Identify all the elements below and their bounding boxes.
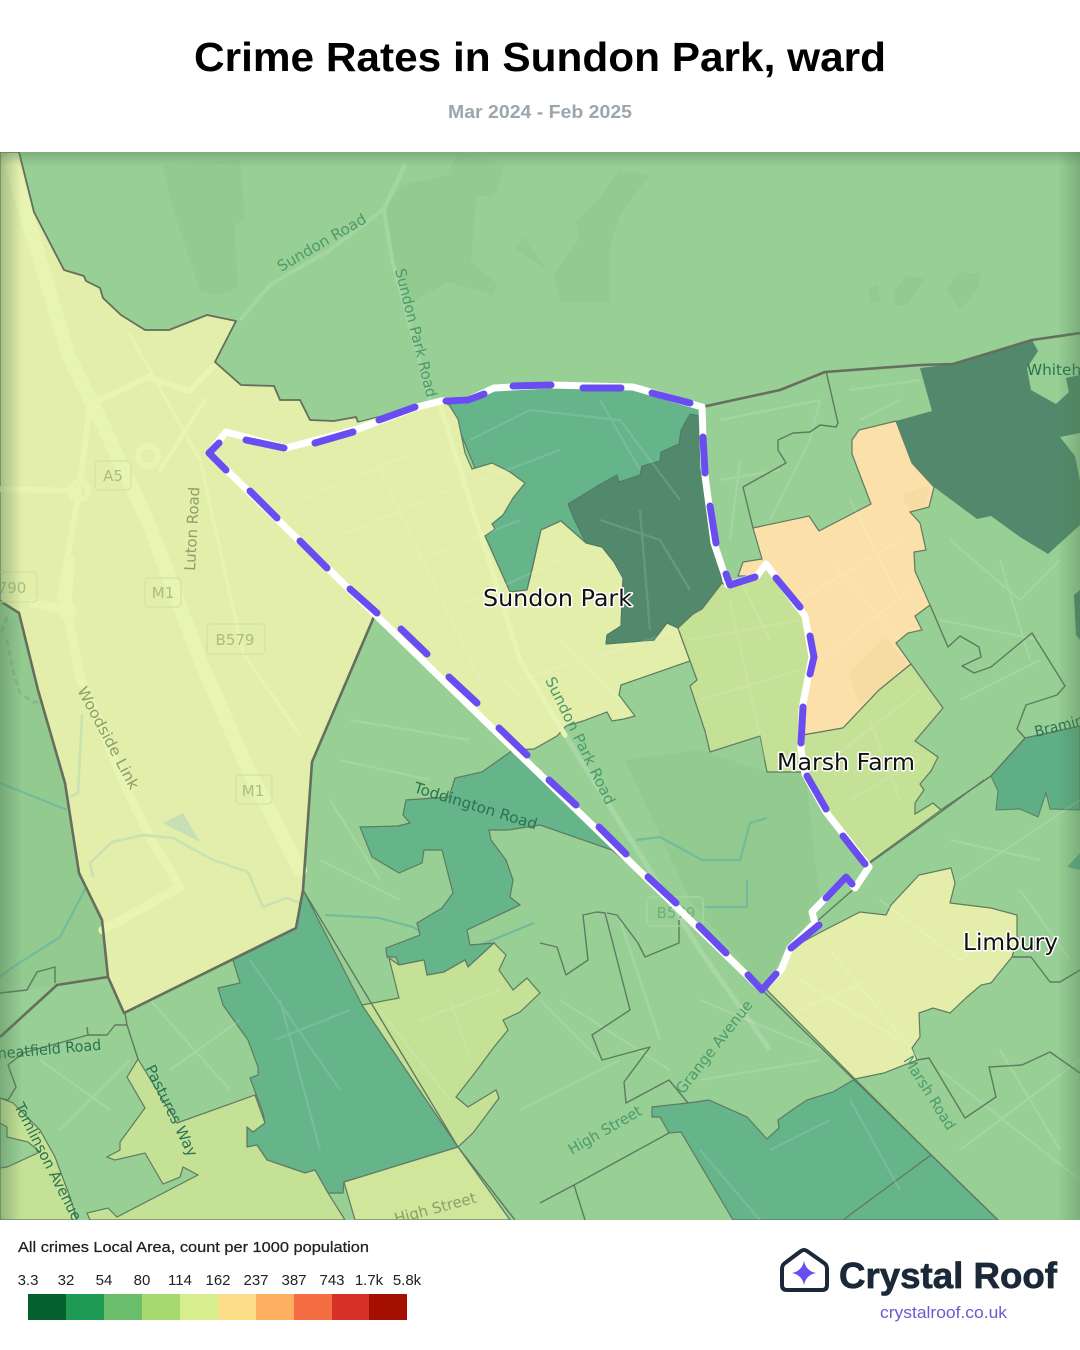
label: Tomlinson Avenue: Tomlinson Avenue: [10, 1099, 85, 1224]
label: High Street east: High Street: [565, 1102, 645, 1158]
legend tick labels: 5.8k: [393, 1272, 422, 1289]
ward boundary: Sundon Park: [209, 385, 869, 990]
region: Toddington Road teal: [360, 750, 624, 975]
thick boundary lines: [0, 152, 1080, 1037]
icon: house with star: [782, 1250, 827, 1290]
shield: M1 north: M1: [152, 584, 174, 602]
base layer: medium green areas: [0, 152, 1080, 1220]
legend tick labels: 54: [96, 1272, 112, 1289]
region: dark green north of Sundon Park: [568, 414, 722, 644]
region: High Street light green: [344, 1147, 510, 1220]
logo: Crystal Roof: [782, 1250, 1058, 1322]
shield: B-road east: [647, 897, 703, 926]
place label: Limbury: Limbury: [963, 930, 1058, 956]
legend colour scale: [28, 1294, 407, 1320]
shield: 790: [0, 572, 37, 602]
legend tick labels: 387: [281, 1272, 307, 1289]
legend tick labels: 114: [168, 1272, 192, 1289]
shield: A5: [95, 461, 131, 490]
choropleth map: [0, 152, 1080, 1228]
label: Luton Road: Luton Road: [181, 486, 203, 571]
district boundary lines: [0, 371, 1080, 1220]
region: Tomlinson corner: [0, 1098, 77, 1220]
label: Toddington Road: Toddington Road: [411, 778, 540, 833]
logo wordmark: Crystal Roof: [839, 1255, 1058, 1296]
legend tick labels: 237: [243, 1272, 269, 1289]
region: south centre light green: [362, 943, 540, 1147]
label: Woodside Link: Woodside Link: [73, 683, 143, 793]
region: south teal: [652, 1079, 998, 1220]
legend tick labels: 162: [205, 1272, 231, 1289]
website url: crystalroof.co.uk: [880, 1303, 1008, 1322]
region: far right teal sliver: [1067, 853, 1080, 870]
title: Crime Rates in Sundon Park, ward: [194, 34, 886, 80]
legend: [18, 1239, 422, 1320]
shield: M1 south: M1: [242, 782, 264, 800]
legend tick labels: 32: [58, 1272, 74, 1289]
subtitle: date range: Mar 2024 - Feb 2025: [448, 102, 632, 122]
major roads in west area: [0, 486, 568, 934]
road shields: [0, 461, 703, 926]
shield: B-road east: B579: [657, 904, 695, 922]
place label: Sundon Park: Sundon Park: [483, 586, 633, 612]
label: Grange Avenue: Grange Avenue: [672, 997, 756, 1097]
faint street network: [40, 380, 1080, 1220]
label: High Street south: High Street: [392, 1189, 478, 1228]
region: peach Marsh Farm north: [738, 421, 934, 735]
legend tick labels: 80: [134, 1272, 150, 1289]
region: light green Marsh Farm: [678, 564, 943, 864]
shield: B579: [207, 624, 265, 654]
label: Sundon Road: Sundon Road: [274, 210, 370, 275]
ward outline white: [209, 385, 869, 990]
railway sidings west: [0, 617, 43, 702]
region: west and Sundon Park yellow: [0, 152, 690, 1013]
shield: M1 north: [145, 578, 181, 607]
legend tick labels: 3.3: [18, 1272, 38, 1289]
label: Sundon Park Road north: Sundon Park Road: [391, 267, 441, 399]
legend tick labels: 1.7k: [355, 1272, 384, 1289]
legend tick labels: 743: [319, 1272, 345, 1289]
label: Pastures Way: Pastures Way: [141, 1062, 201, 1160]
region: large south west teal: [218, 890, 458, 1193]
shield: B579: B579: [216, 631, 254, 649]
place label: Marsh Farm: Marsh Farm: [777, 750, 915, 776]
road labels: [0, 210, 1080, 1228]
light roads on the northern fields: [240, 165, 430, 400]
region: Pastures Way light green: [87, 1059, 345, 1220]
region: Limbury yellow: [767, 868, 1017, 1079]
region: Bramingham teal: [991, 726, 1080, 817]
region: dark green north east: [896, 340, 1080, 640]
label: Marsh Road: Marsh Road: [900, 1053, 959, 1133]
streams: [0, 783, 767, 977]
region: Sundon Park north teal: [449, 385, 702, 592]
legend title: All crimes Local Area, count per 1000 population: [18, 1239, 369, 1256]
label: Sundon Park Road south: Sundon Park Road: [541, 674, 619, 808]
shield: A5: A5: [103, 467, 123, 485]
pond and stream in west area: [70, 715, 300, 907]
ward dashes purple: [209, 385, 865, 990]
legend tick labels: [18, 1272, 422, 1289]
shield: M1 south: [236, 775, 272, 804]
